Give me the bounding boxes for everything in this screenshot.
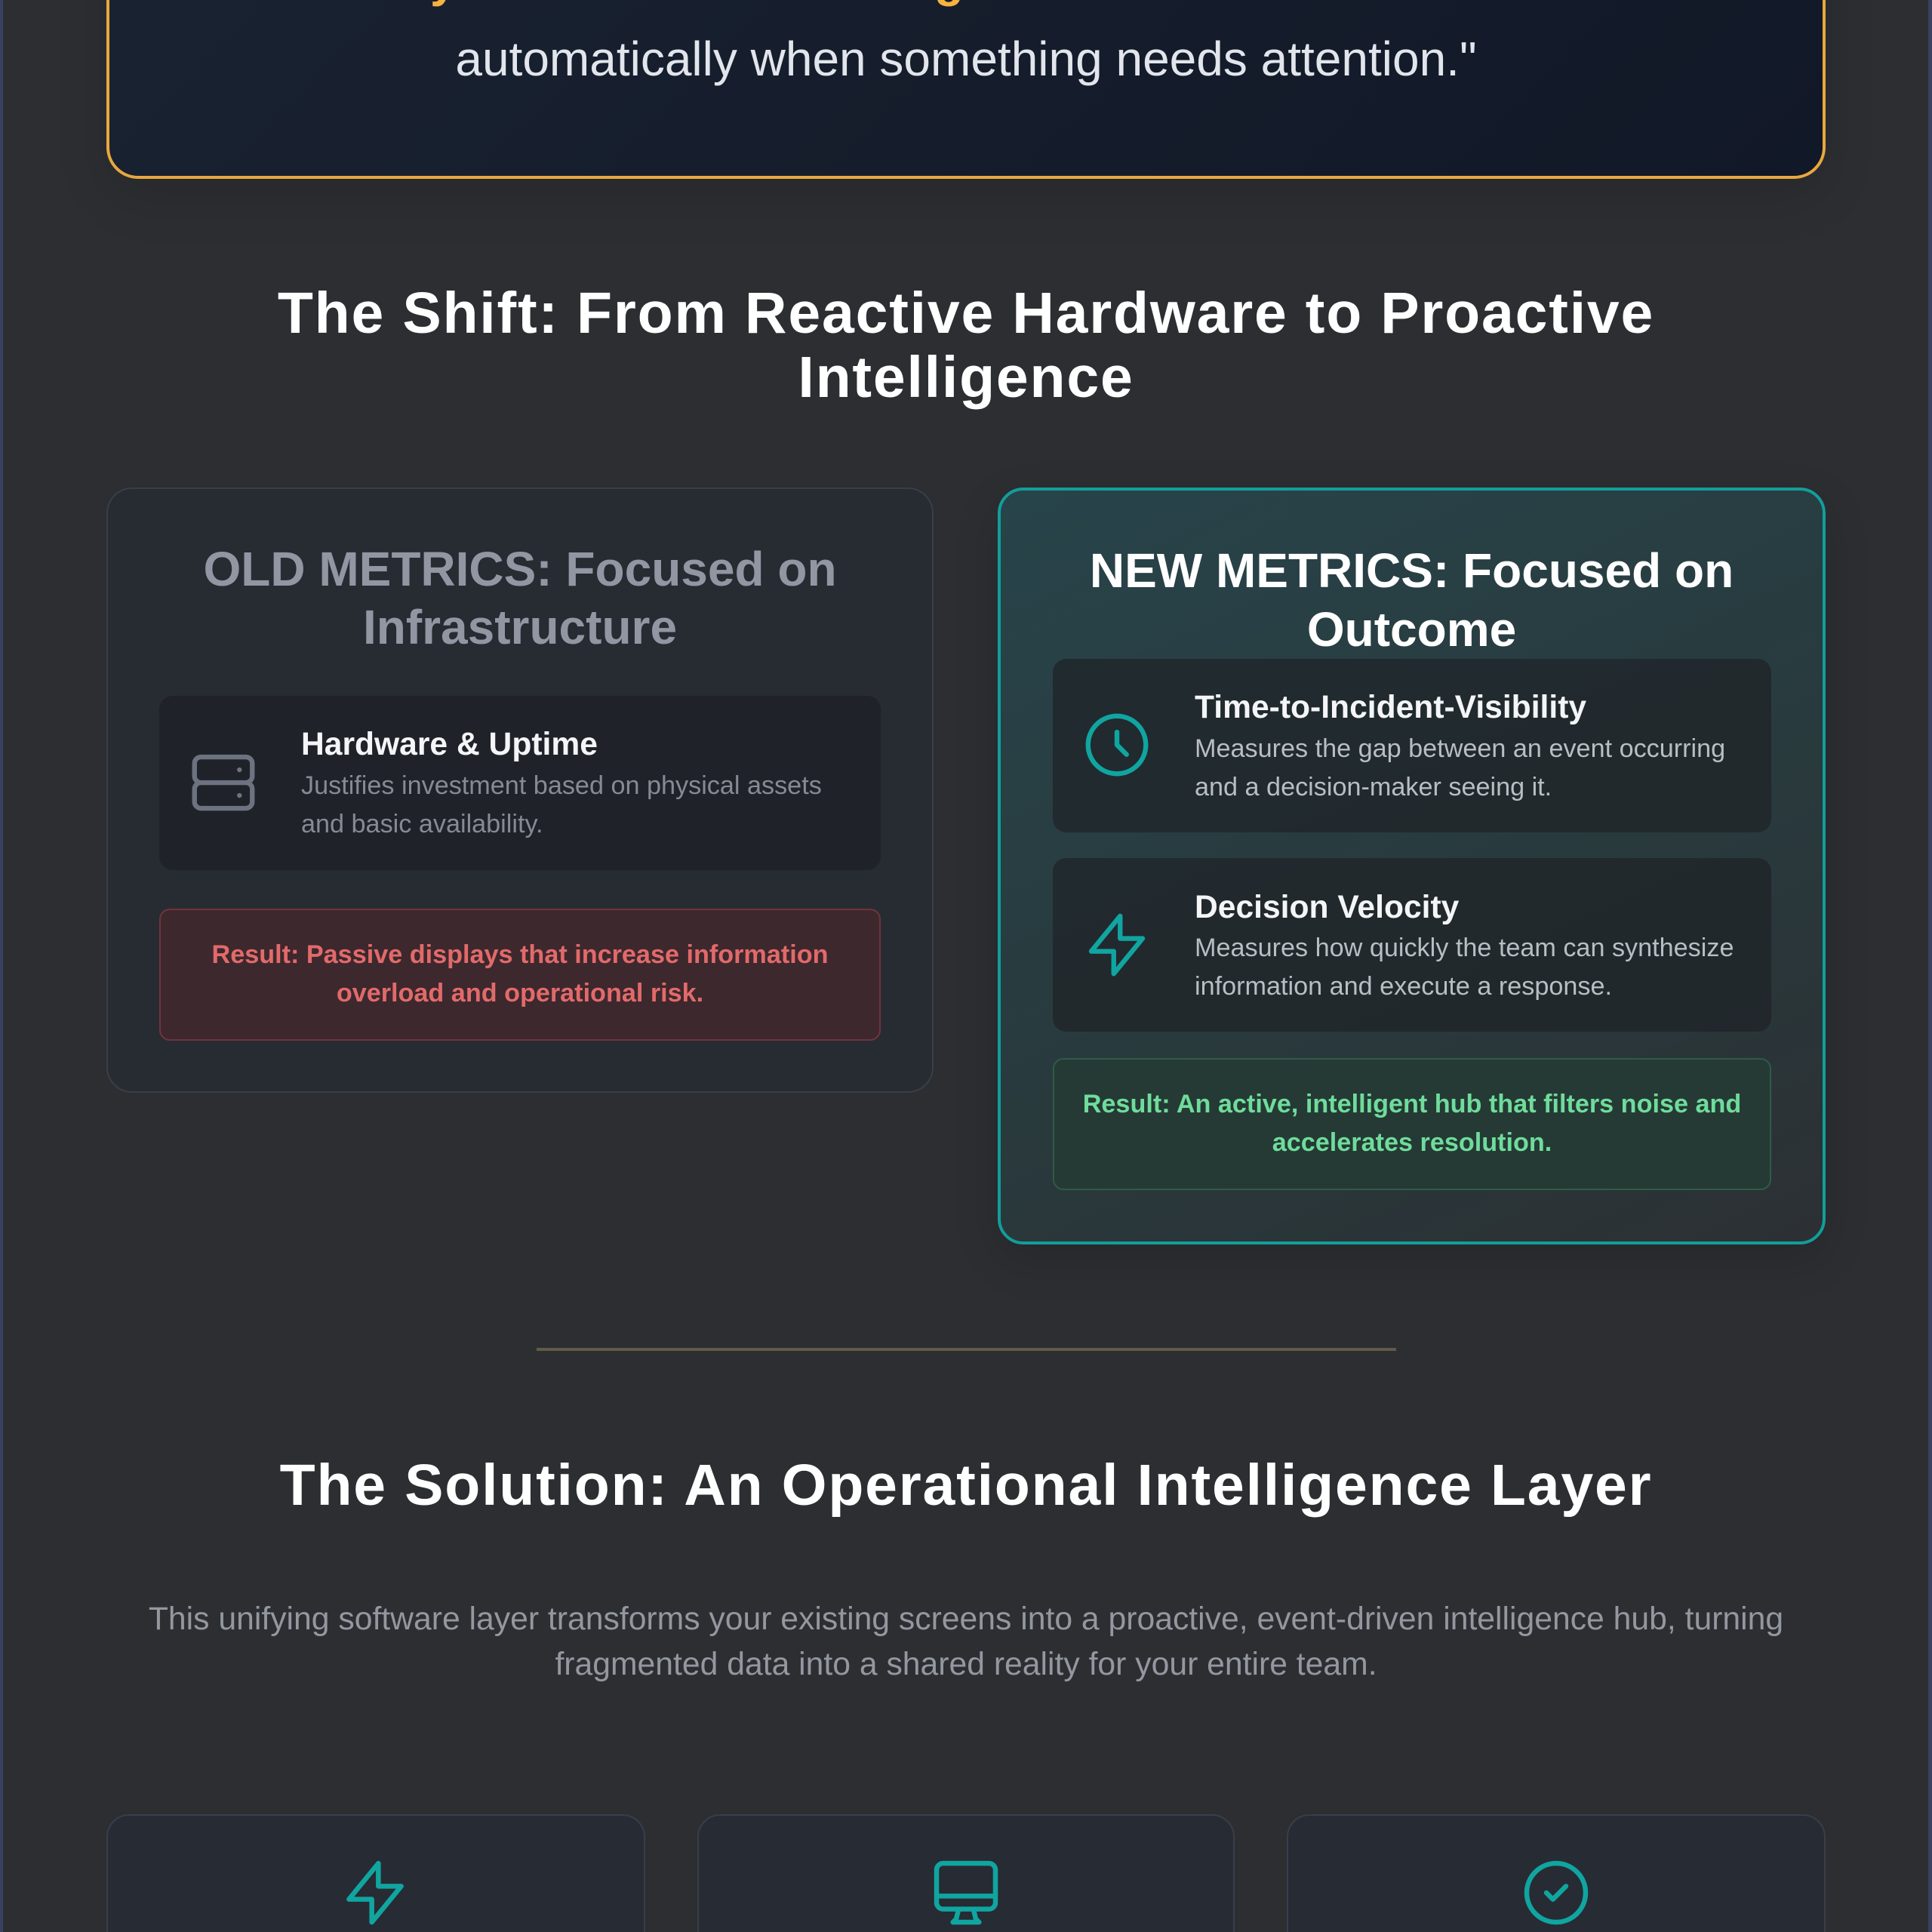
panel: old metrics <box>106 488 934 1093</box>
heading: the solution: The Solution: An Operational Intelligence Layer <box>280 1453 1652 1518</box>
result: new <box>1053 1058 1771 1190</box>
old metrics title: Infrastructure <box>363 600 677 654</box>
quote text: automatically when something needs attention." <box>455 32 1477 86</box>
intro line 1: This unifying software layer transforms your existing screens into a proactive, event-driven intelligence hub, turning <box>149 1601 1783 1637</box>
icon: lightning <box>1088 913 1146 977</box>
metric card: hardware and uptime <box>159 696 881 870</box>
metric description line 2: information and execute a response. <box>1195 972 1612 1001</box>
icon: server <box>192 755 255 811</box>
result line 2: accelerates resolution. <box>1272 1128 1552 1157</box>
new metrics title: NEW METRICS: Focused on <box>1090 543 1734 598</box>
metric description: Measures the gap between an event occurring <box>1195 734 1725 763</box>
old metrics title: OLD METRICS: Focused on <box>203 542 837 596</box>
intro line 2: fragmented data into a shared reality for your entire team. <box>555 1646 1377 1682</box>
icon: lightning <box>346 1861 404 1924</box>
metric title: Time-to-Incident-Visibility <box>1195 689 1586 725</box>
panel: quote hero <box>106 0 1826 179</box>
icon: check circle <box>1524 1861 1588 1924</box>
intro paragraph <box>149 1601 1783 1682</box>
result line 1: Result: Passive displays that increase information <box>211 940 828 969</box>
panel: new metrics <box>998 488 1826 1244</box>
new metrics title: Outcome <box>1307 602 1516 657</box>
metric card: decision velocity <box>1053 858 1771 1032</box>
page frame: left edge <box>0 0 3 1932</box>
panel: card 1 <box>106 1814 645 1932</box>
metric card: time to incident visibility <box>1053 659 1771 832</box>
page frame: right edge <box>1928 0 1932 1932</box>
icon: monitor <box>934 1861 998 1924</box>
metric description: Measures how quickly the team can synthesize <box>1195 934 1734 962</box>
divider <box>537 1348 1396 1351</box>
new metrics title <box>1090 543 1734 657</box>
metric description line 2: and basic availability. <box>301 810 543 838</box>
metric description: Justifies investment based on physical assets <box>301 771 822 800</box>
icon: clock <box>1085 714 1149 776</box>
metric title: Decision Velocity <box>1195 889 1459 925</box>
panel: card 2 <box>697 1814 1235 1932</box>
heading: the shift <box>278 281 1654 410</box>
result: old <box>159 909 881 1041</box>
panel: card 3 <box>1287 1814 1826 1932</box>
metric description line 2: and a decision-maker seeing it. <box>1195 773 1552 801</box>
heading line 2: Intelligence <box>798 345 1134 410</box>
metric title: Hardware & Uptime <box>301 726 598 762</box>
heading line 1: The Shift: From Reactive Hardware to Proactive <box>278 281 1654 346</box>
result line 1: Result: An active, intelligent hub that filters noise and <box>1083 1090 1741 1118</box>
result line 2: overload and operational risk. <box>337 979 703 1008</box>
old metrics title <box>203 542 837 654</box>
